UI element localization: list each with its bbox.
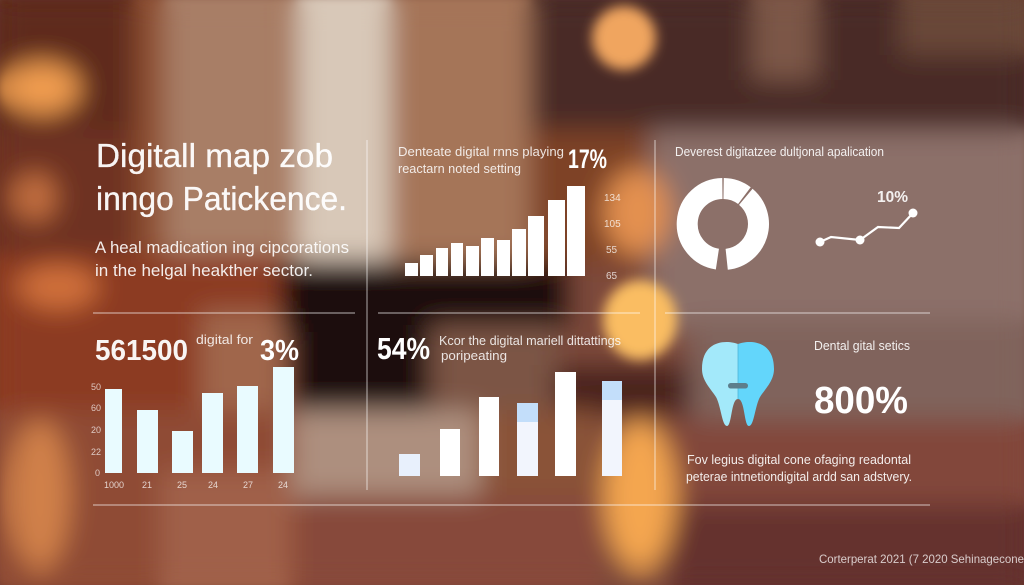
panel: bottom-left bar chart — [91, 333, 299, 490]
x axis labels: 24 — [208, 480, 218, 490]
caption: digital for — [196, 333, 253, 347]
panel heading: Deverest digitatzee dultjonal apalication — [675, 144, 884, 159]
stat: 10%: 10% — [877, 189, 908, 206]
description: Fov legius digital cone ofaging readontal — [687, 452, 911, 467]
y axis labels: 60 — [91, 403, 101, 413]
bar chart: six bars — [105, 367, 294, 473]
axis labels — [604, 193, 621, 282]
stat: 17%: 17% — [568, 144, 607, 174]
panel heading — [439, 333, 621, 363]
panel heading: Kcor the digital mariell dittattings — [439, 333, 621, 348]
axis labels: 105 — [604, 219, 621, 230]
axis labels: 65 — [606, 271, 618, 282]
subtitle: A heal madication ing cipcorations — [95, 239, 349, 257]
title — [96, 137, 347, 217]
description — [686, 452, 912, 484]
panel: dental stat — [686, 338, 912, 484]
bar chart: rising bars — [405, 186, 585, 276]
stat: 3%: 3% — [260, 335, 299, 367]
panel: donut and line — [675, 144, 918, 259]
title: inngo Patickence. — [96, 180, 347, 217]
stat: 800%: 800% — [814, 380, 908, 422]
panel heading — [398, 144, 564, 176]
subtitle: in the helgal heakther sector. — [95, 262, 313, 280]
panel: rising bar chart — [398, 144, 621, 282]
panel heading: reactarn noted setting — [398, 161, 521, 176]
panel heading: poripeating — [441, 348, 507, 363]
x axis labels: 24 — [278, 480, 288, 490]
y axis labels: 0 — [95, 468, 100, 478]
axis labels: 55 — [606, 245, 618, 256]
y axis labels: 50 — [91, 382, 101, 392]
stat: 54%: 54% — [377, 331, 430, 366]
donut chart — [687, 188, 758, 259]
x axis labels: 21 — [142, 480, 152, 490]
title: Digitall map zob — [96, 137, 333, 174]
panel: bottom-center stacked bars — [377, 331, 622, 476]
line chart — [816, 208, 918, 246]
panel heading: Denteate digital rnns playing — [398, 144, 564, 159]
bar chart: stacked bars — [399, 372, 622, 476]
y axis labels: 20 — [91, 425, 101, 435]
x axis labels: 1000 — [104, 480, 124, 490]
x axis labels — [104, 480, 288, 490]
x axis labels: 27 — [243, 480, 253, 490]
description: peterae intnetiondigital ardd san adstvery. — [686, 469, 912, 484]
subtitle — [95, 239, 349, 280]
axis labels: 134 — [604, 193, 621, 204]
y axis labels: 22 — [91, 447, 101, 457]
panel heading: Dental gital setics — [814, 338, 910, 353]
y axis labels — [91, 382, 101, 478]
icon: tooth — [702, 342, 774, 426]
stat: 561500: 561500 — [95, 335, 188, 367]
x axis labels: 25 — [177, 480, 187, 490]
